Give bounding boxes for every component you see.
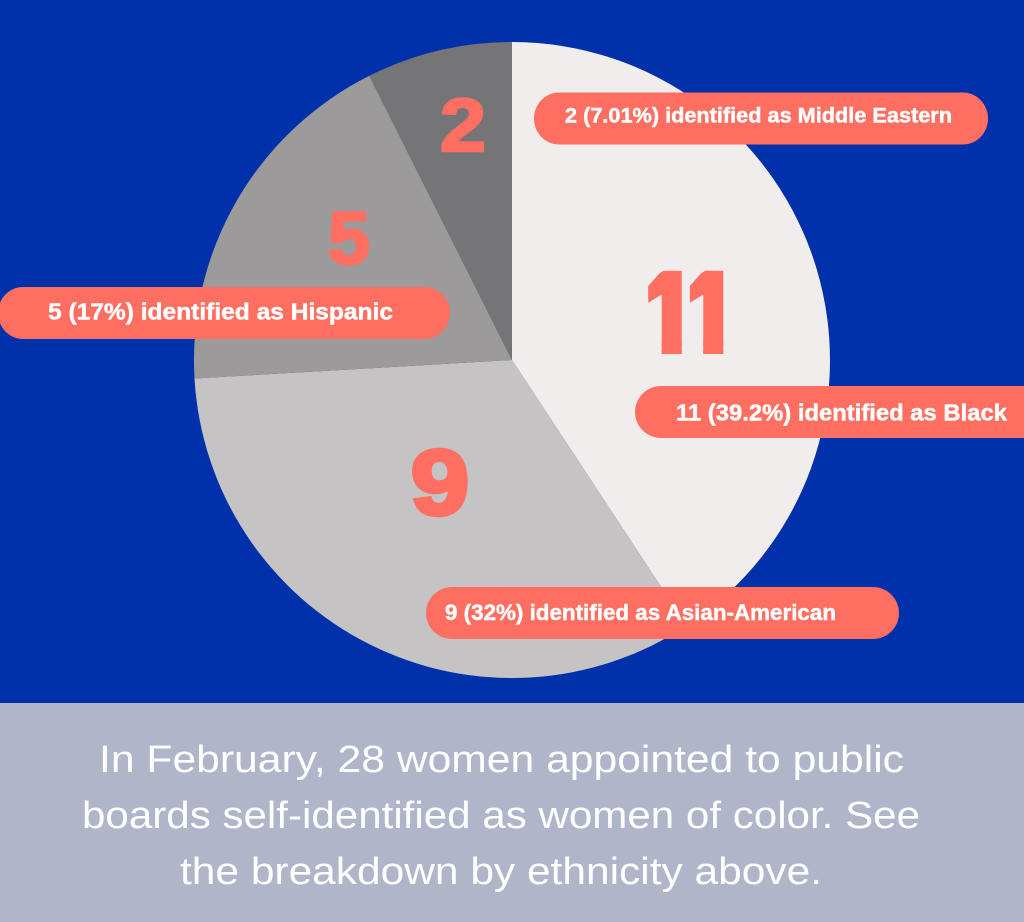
- slice: Hispanic, 5: [194, 76, 512, 379]
- footer text: the breakdown by ethnicity above.: [180, 851, 822, 893]
- callout: Hispanic: [0, 287, 450, 339]
- callout: Asian-American: 9 (32%) identified as Asian-American: [445, 600, 836, 625]
- slice: Middle Eastern, 2: [369, 42, 512, 360]
- callout: Middle Eastern: [534, 92, 988, 144]
- slice: Asian-American, 9: [194, 360, 687, 678]
- callout: Black: [635, 386, 1024, 438]
- callout: Black: 11 (39.2%) identified as Black: [676, 400, 1007, 426]
- footer text: boards self-identified as women of color. See: [82, 795, 920, 837]
- pie chart: breakdown by ethnicity: [194, 42, 830, 678]
- slice: Black, 11: [512, 42, 830, 626]
- callout: Asian-American: [426, 587, 899, 639]
- number: 2: 2: [440, 83, 486, 167]
- footer text: [82, 739, 920, 893]
- number: 5: 5: [328, 197, 370, 280]
- number: 9: 9: [411, 432, 469, 534]
- number: 11: 11: [638, 249, 744, 379]
- callout: Hispanic: 5 (17%) identified as Hispanic: [48, 298, 393, 324]
- footer panel: [0, 703, 1024, 922]
- footer text: In February, 28 women appointed to public: [99, 739, 904, 781]
- callout: Middle Eastern: 2 (7.01%) identified as Middle Eastern: [565, 104, 952, 128]
